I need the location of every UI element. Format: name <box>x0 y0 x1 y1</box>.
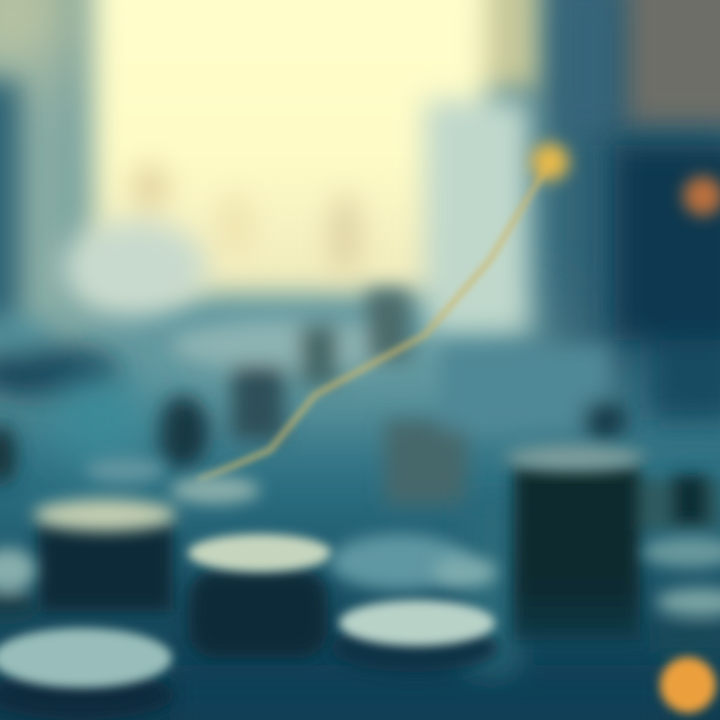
line chart: rising gold trend line <box>200 165 548 480</box>
bowls: right edge stack <box>642 537 720 653</box>
background: dark right wall <box>615 145 720 420</box>
background: mid-distance dark objects <box>0 290 627 505</box>
background: pale blurred figure <box>63 164 361 316</box>
table: dark surface <box>170 500 670 720</box>
background: teal haze behind left objects <box>50 375 150 465</box>
background: left dark column <box>0 80 120 398</box>
marker: orange dot upper right <box>683 176 720 216</box>
marker: orange dot lower right <box>660 657 716 713</box>
bowl: right centre <box>330 534 500 672</box>
marker: yellow dot at line end <box>531 143 569 181</box>
bowl: centre <box>188 534 332 658</box>
bowl: lower left <box>0 548 175 720</box>
cup: tall dark cylinder <box>505 445 720 640</box>
bowl: upper left <box>33 458 260 612</box>
background: window glow and walls <box>0 0 720 410</box>
